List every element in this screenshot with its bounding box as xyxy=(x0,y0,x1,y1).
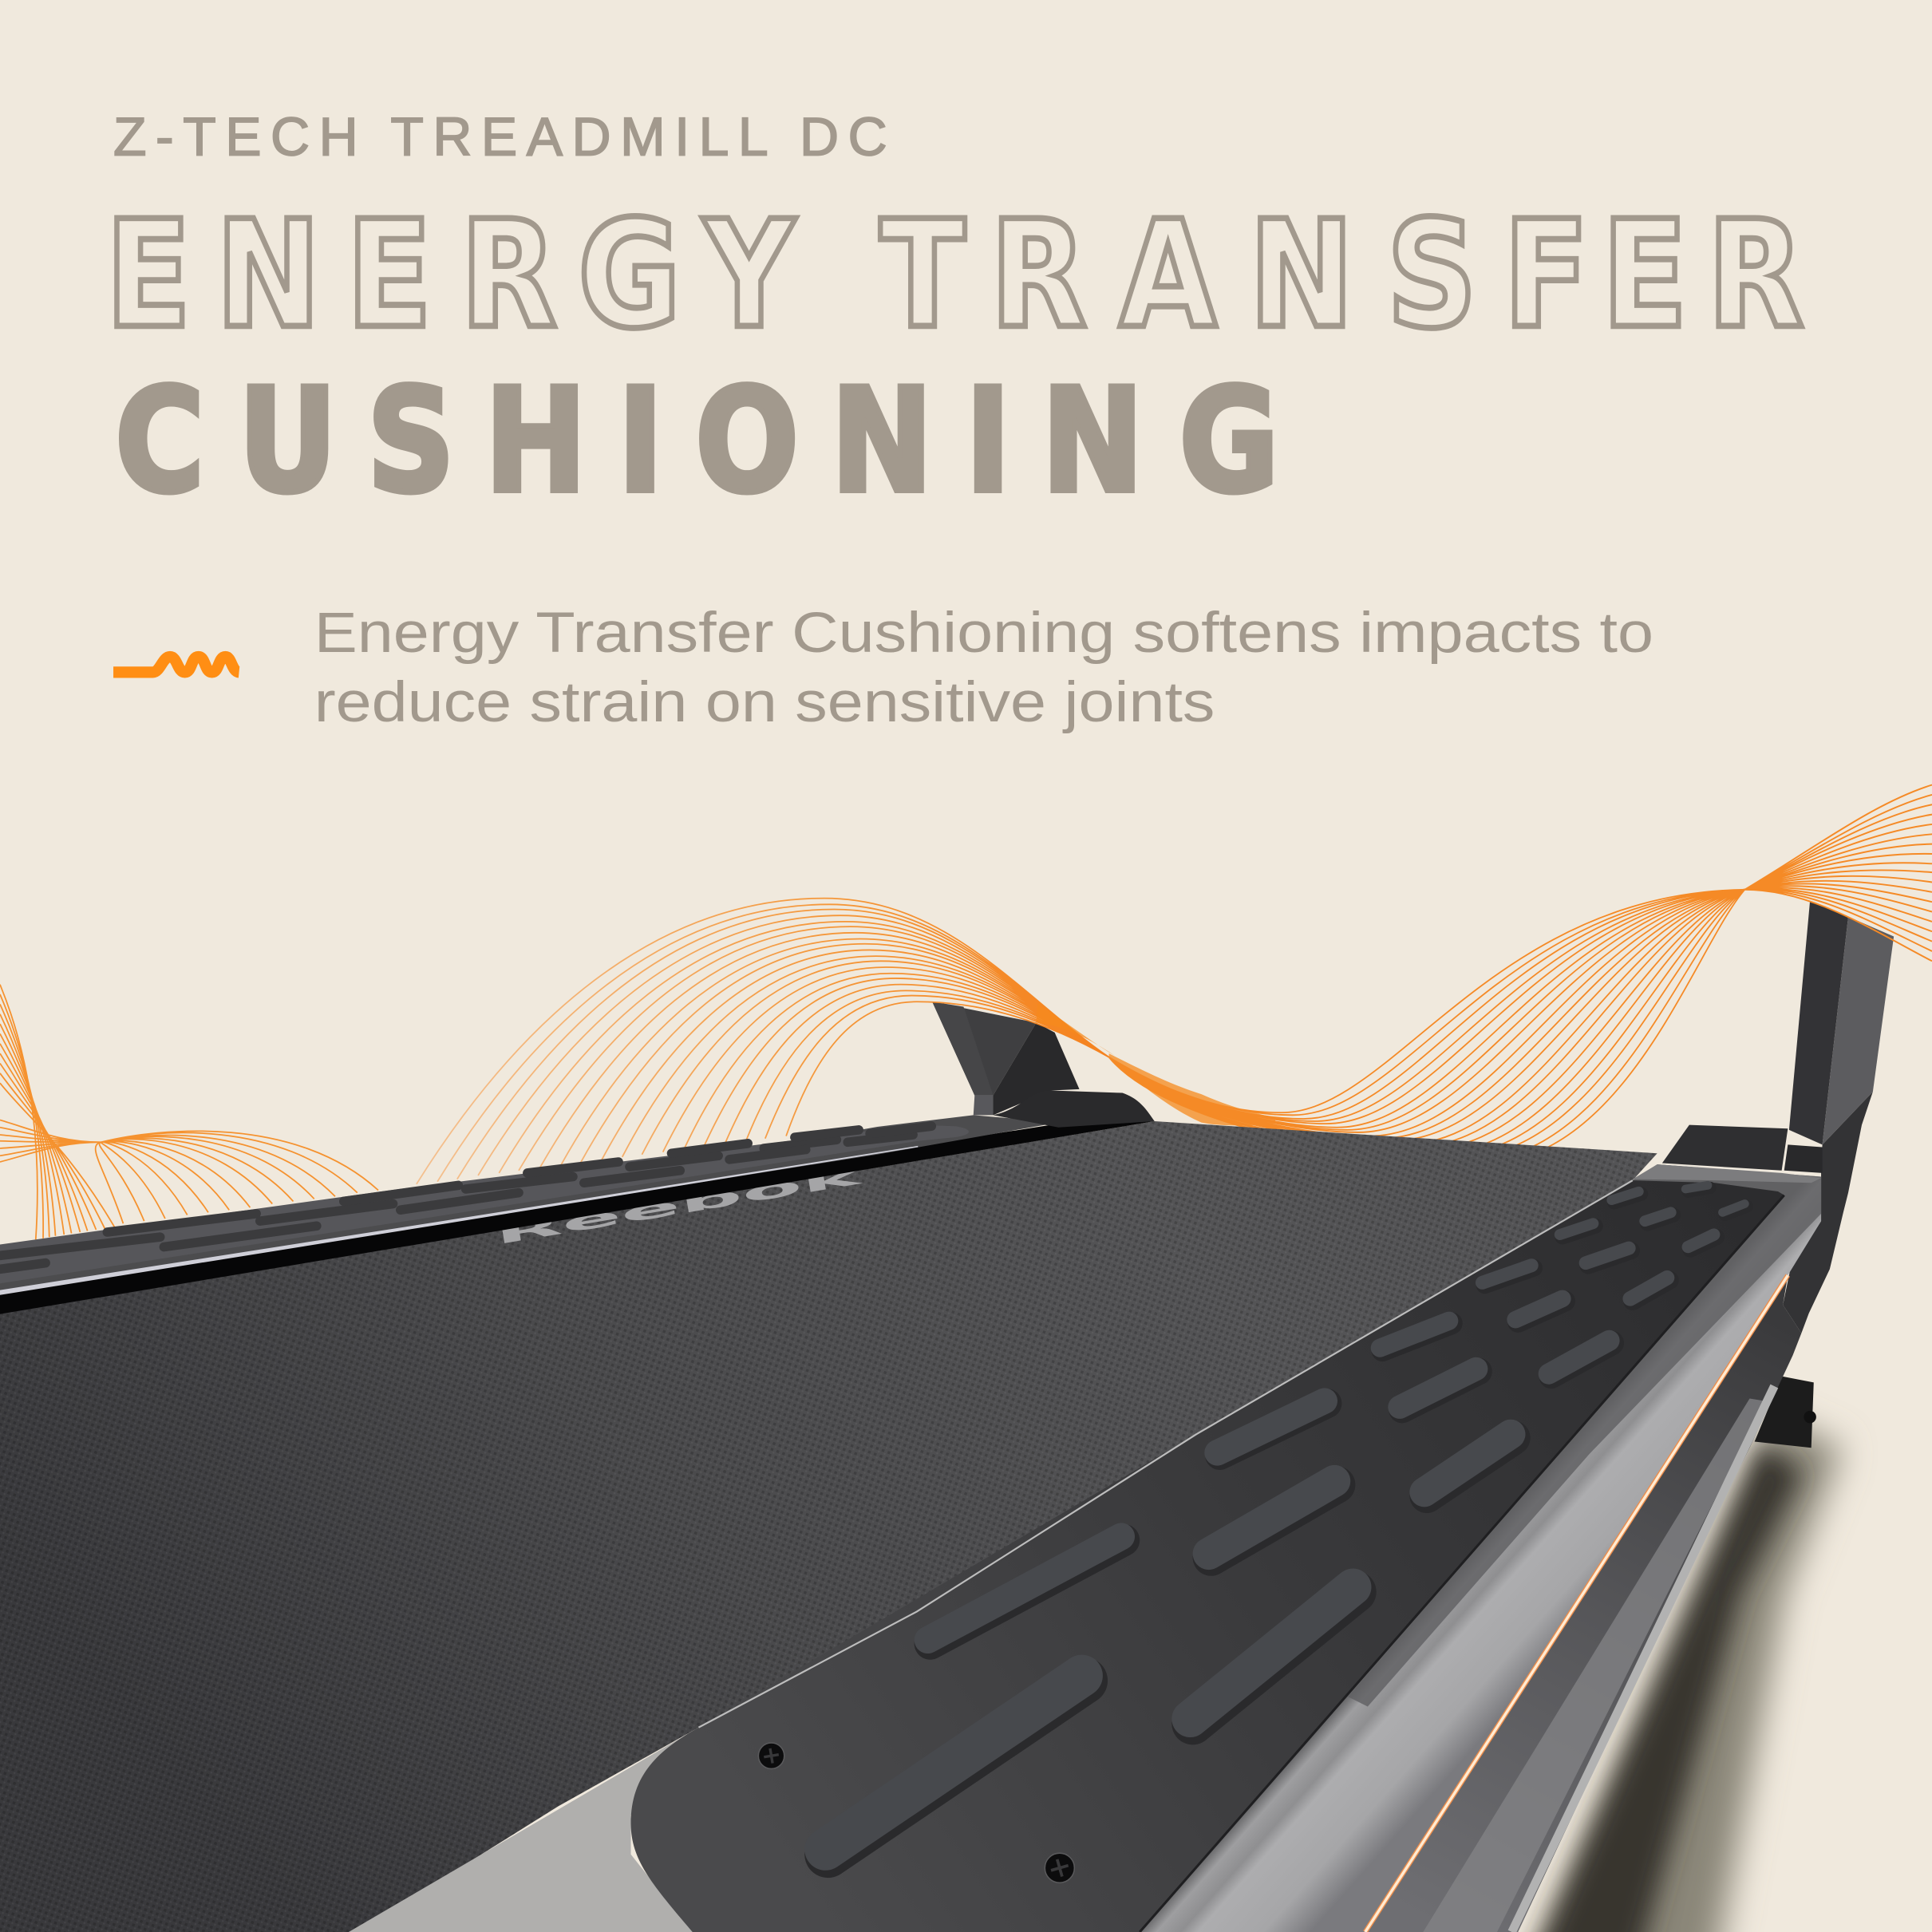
right upright xyxy=(1783,901,1894,1333)
wave bundle: centre arch xyxy=(417,899,1109,1184)
icon: orange spring line xyxy=(113,657,239,672)
side plate pad tops xyxy=(825,1185,1744,1850)
right rail main surface xyxy=(1140,1164,1821,1932)
rail far strip xyxy=(1633,1164,1821,1183)
floor shadow xyxy=(1518,1417,1842,1932)
far rail highlight xyxy=(0,1146,918,1295)
far foot xyxy=(993,1090,1155,1128)
orange light line xyxy=(1365,1275,1788,1932)
right rail dark band xyxy=(1365,1275,1801,1932)
side plate xyxy=(631,1180,1784,1932)
wave bundle: right fan xyxy=(1744,785,1932,961)
screw right xyxy=(1045,1853,1074,1883)
rail light edge xyxy=(1511,1386,1774,1932)
screw left xyxy=(758,1743,784,1768)
far rail tongue xyxy=(0,1115,1058,1293)
walking belt xyxy=(0,1121,1657,1932)
heading: outlined line: ENERGY TRANSFER xyxy=(0,188,1804,362)
far side pads xyxy=(0,1126,931,1269)
belt texture xyxy=(0,1121,1657,1932)
wheel xyxy=(1755,1377,1816,1448)
silver wedge xyxy=(349,1728,698,1932)
heading: solid line: CUSHIONING xyxy=(115,359,1279,525)
description text: Energy Transfer Cushioning softens impacts to xyxy=(314,602,1653,665)
kicker: product name: Z-TECH TREADMILL DC xyxy=(113,108,887,168)
plate right edge xyxy=(1140,1195,1784,1932)
wave bundle: converging band xyxy=(1037,1003,1275,1125)
belt logo: Reebok xyxy=(492,1160,864,1250)
far side plate xyxy=(0,1125,969,1283)
hinge xyxy=(1784,1144,1823,1173)
wave bundle: rising fan xyxy=(1109,890,1744,1164)
side plate pads xyxy=(828,1187,1747,1855)
flap xyxy=(1662,1125,1788,1171)
left post xyxy=(932,1002,1080,1115)
rail ridge xyxy=(1423,1398,1764,1932)
description text: reduce strain on sensitive joints xyxy=(314,671,1215,734)
treadmill deck xyxy=(0,1090,1823,1932)
far side rail gap xyxy=(0,1121,1155,1314)
rail far strip and shade xyxy=(1348,1164,1821,1706)
wave bundle: far left xyxy=(0,985,378,1239)
description text xyxy=(314,602,1653,734)
plate edge highlight xyxy=(698,1180,1633,1728)
